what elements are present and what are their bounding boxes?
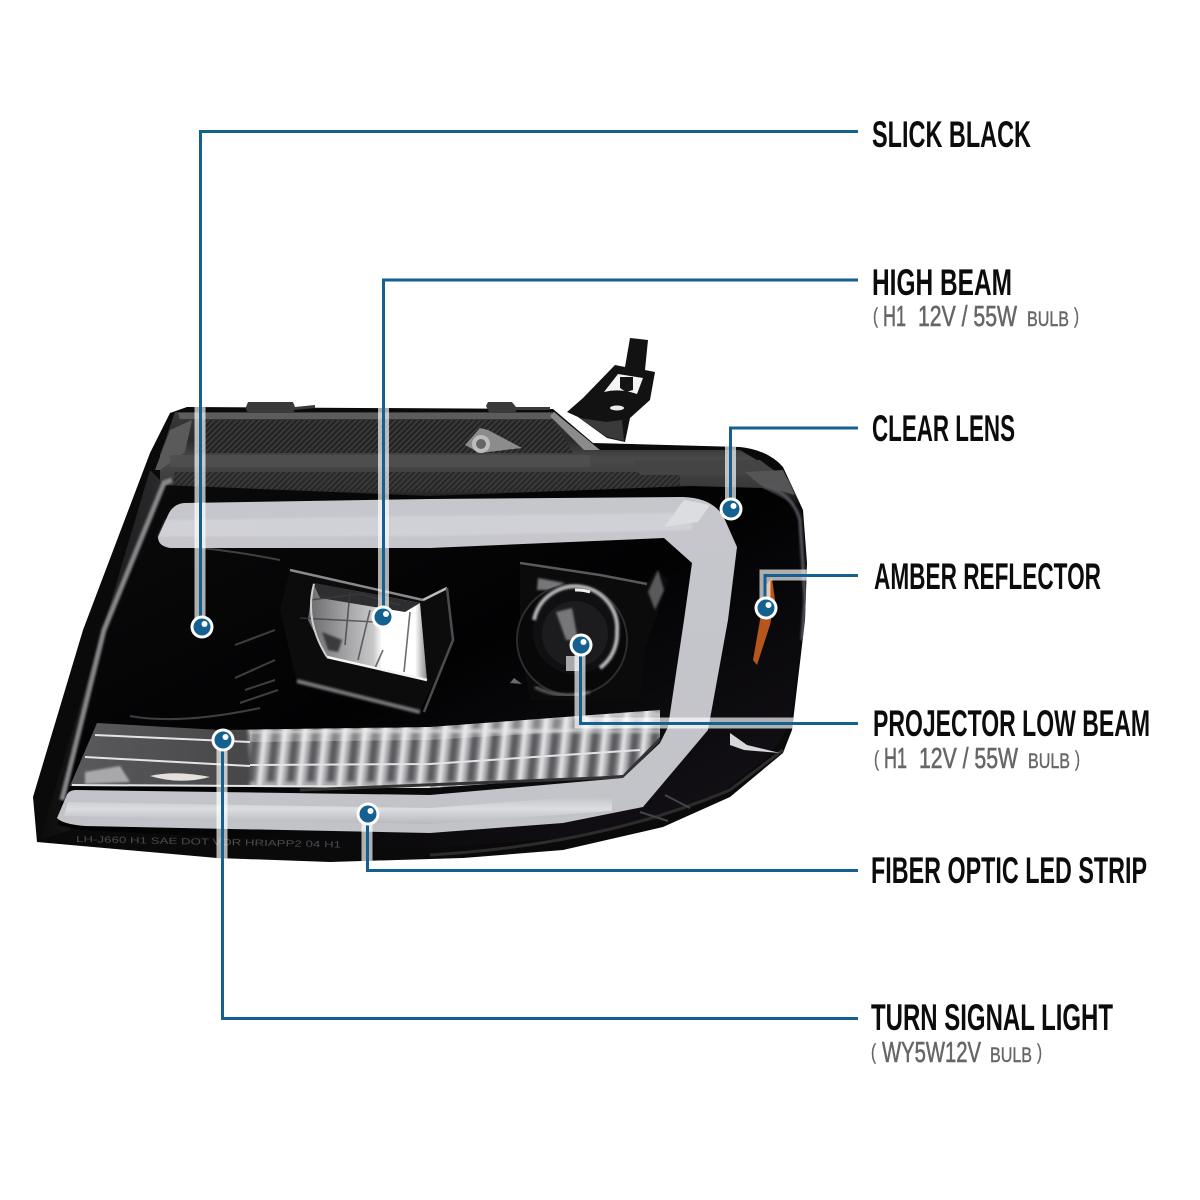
- callout: high beam leader: [372, 280, 858, 628]
- left lens soft reflections: [130, 545, 280, 719]
- mounting bracket: [567, 338, 655, 442]
- spec: high beam bulb: BULB: [1027, 308, 1069, 331]
- spec: high beam bulb: H1: [883, 301, 906, 333]
- lower lip highlight: [430, 750, 783, 855]
- callout: slick black leader: [190, 132, 858, 638]
- label: high beam: HIGH BEAM: [872, 262, 1012, 303]
- bezel silver trim: [62, 480, 172, 800]
- spec: turn signal bulb: WY5W12V: [882, 1037, 981, 1069]
- spec: low beam bulb: BULB: [1028, 750, 1070, 773]
- spec: turn signal bulb: ): [1037, 1041, 1042, 1064]
- embossed lens marking: LH-J660 H1 SAE DOT VOR HRIAPP2 04 H1: [76, 834, 341, 850]
- spec: turn signal bulb: (: [871, 1041, 876, 1064]
- label: slick black: SLICK BLACK: [872, 114, 1031, 155]
- fiber optic LED tube: [57, 497, 737, 833]
- turn signal chrome section: [70, 705, 665, 792]
- small fin reflector: [730, 733, 780, 753]
- label: clear lens: CLEAR LENS: [872, 408, 1015, 449]
- high beam module frame: [280, 570, 455, 712]
- spec: turn signal bulb: BULB: [990, 1044, 1032, 1067]
- spec: high beam bulb: (: [873, 305, 878, 328]
- callout: projector low beam leader: [570, 634, 858, 724]
- clear lens upper glare: [465, 428, 522, 453]
- callout: amber reflector leader: [754, 575, 858, 620]
- spec: low beam bulb: H1: [884, 743, 907, 775]
- callout: turn signal leader: [212, 728, 858, 1018]
- spec: low beam bulb: ): [1075, 748, 1080, 771]
- spec: high beam bulb: [873, 301, 1079, 333]
- spec: high beam bulb: 12V / 55W: [918, 301, 1017, 333]
- upper housing band: [160, 412, 800, 505]
- housing silhouette: [33, 407, 807, 862]
- callout: fiber optic strip leader: [356, 802, 858, 870]
- high beam chrome reflector: [308, 583, 427, 680]
- callout: clear lens leader: [720, 428, 858, 520]
- spec: low beam bulb: [874, 743, 1080, 775]
- spec: high beam bulb: ): [1074, 305, 1079, 328]
- spec: low beam bulb: (: [874, 748, 879, 771]
- amber reflector: [753, 578, 775, 665]
- carbon texture panel: [195, 420, 573, 453]
- black lens: [58, 485, 803, 848]
- left bezel: [64, 470, 162, 832]
- headlight product photo: [33, 338, 807, 862]
- top clips: [246, 402, 550, 414]
- projector lens: [510, 585, 627, 695]
- spec: low beam bulb: 12V / 55W: [919, 743, 1018, 775]
- projector shroud: [520, 570, 654, 618]
